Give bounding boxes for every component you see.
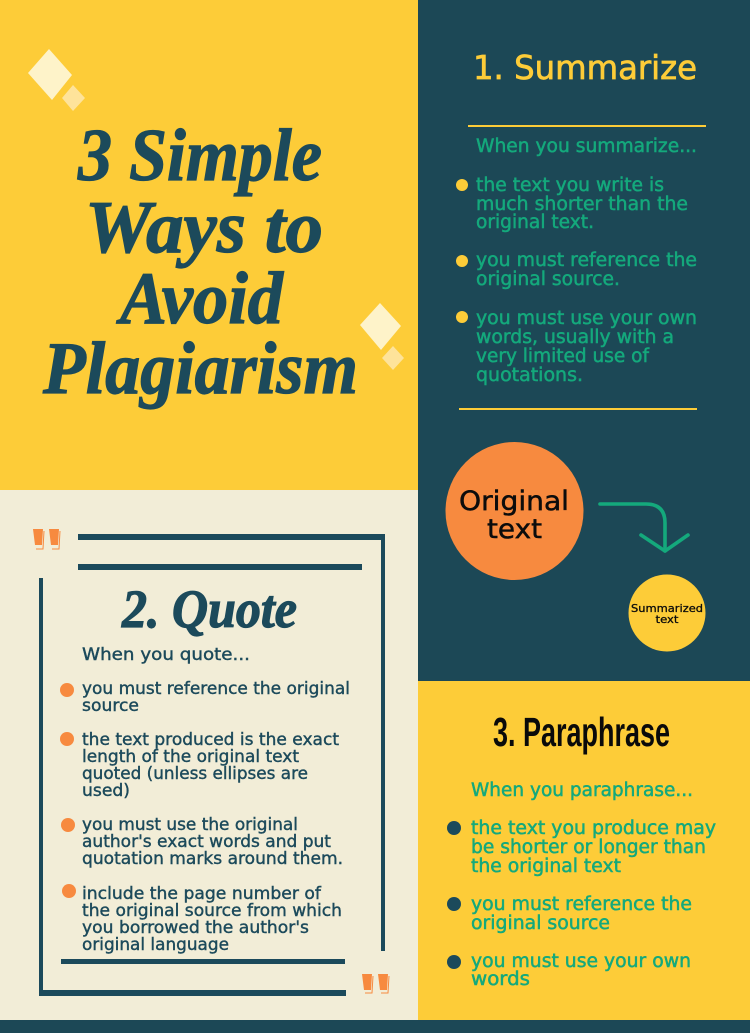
panel: paraphrase background	[418, 681, 750, 1020]
panel: summarize list: original text.	[476, 212, 594, 233]
panel: paraphrase list: the original text	[471, 856, 621, 877]
icon: opening quote mark	[33, 529, 60, 549]
panel: paraphrase list: words	[471, 969, 530, 990]
panel: paraphrase list: you must reference the	[471, 894, 692, 915]
panel: title background	[0, 0, 418, 490]
panel: quote list: original language	[82, 935, 229, 954]
circle: summarized text: text	[656, 613, 679, 626]
arrow	[600, 504, 688, 551]
title	[42, 115, 358, 410]
panel: paraphrase list: be shorter or longer than	[471, 837, 706, 858]
panel: paraphrase list: When you paraphrase...	[471, 780, 693, 801]
panel: quote list: author's exact words and put	[82, 832, 332, 851]
panel: quote background	[0, 490, 418, 1020]
circle: original text: Original	[459, 486, 569, 517]
panel: quote list: quotation marks around them.	[82, 849, 343, 868]
circle: original text: text	[487, 514, 542, 545]
panel: summarize list: the text you write is	[476, 175, 664, 196]
panel: summarize list: very limited use of	[476, 346, 649, 367]
panel: summarize list: quotations.	[476, 365, 583, 386]
panel: quote list: the text produced is the exact	[82, 730, 340, 749]
panel: paraphrase list: the text you produce may	[471, 818, 716, 839]
panel: quote list: you borrowed the author's	[82, 918, 309, 937]
icon: closing quote mark	[362, 974, 389, 993]
panel: quote list: include the page number of	[82, 884, 322, 903]
panel: quote list: the original source from which	[82, 901, 342, 920]
circle: summarized text	[628, 574, 706, 652]
title: Plagiarism	[42, 328, 358, 410]
title: 3 Simple	[77, 115, 322, 197]
panel: summarize list: you must reference the	[476, 250, 697, 271]
heading: 2. Quote: 2. Quote	[121, 579, 297, 639]
panel: quote list: When you quote...	[82, 645, 250, 664]
panel: summarize list: much shorter than the	[476, 194, 688, 215]
panel: quote list	[60, 645, 350, 954]
panel: summarize list: When you summarize...	[476, 136, 697, 157]
icon: diamonds top left	[28, 49, 85, 111]
title: Ways to	[85, 187, 323, 269]
title: Avoid	[116, 258, 284, 340]
panel: quote list: quoted (unless ellipses are	[82, 764, 308, 783]
circle: original text	[446, 442, 584, 580]
panel: quote list: used)	[82, 781, 130, 800]
panel: paraphrase list: original source	[471, 913, 610, 934]
panel: paraphrase list: you must use your own	[471, 951, 691, 972]
panel: quote list: you must use the original	[82, 815, 298, 834]
panel: summarize list: original source.	[476, 269, 620, 290]
icon: diamonds right of title	[360, 303, 404, 370]
panel: quote list: source	[82, 696, 139, 715]
heading: 1. Summarize: 1. Summarize	[473, 48, 697, 87]
frame: quote border	[39, 534, 385, 996]
panel: summarize list: words, usually with a	[476, 327, 674, 348]
panel: paraphrase list	[447, 780, 716, 990]
panel: quote list: you must reference the original	[82, 679, 350, 698]
panel: quote list: length of the original text	[82, 747, 300, 766]
panel: summarize list: you must use your own	[476, 308, 697, 329]
panel: summarize list	[456, 125, 706, 410]
circle: summarized text: Summarized	[631, 602, 703, 615]
